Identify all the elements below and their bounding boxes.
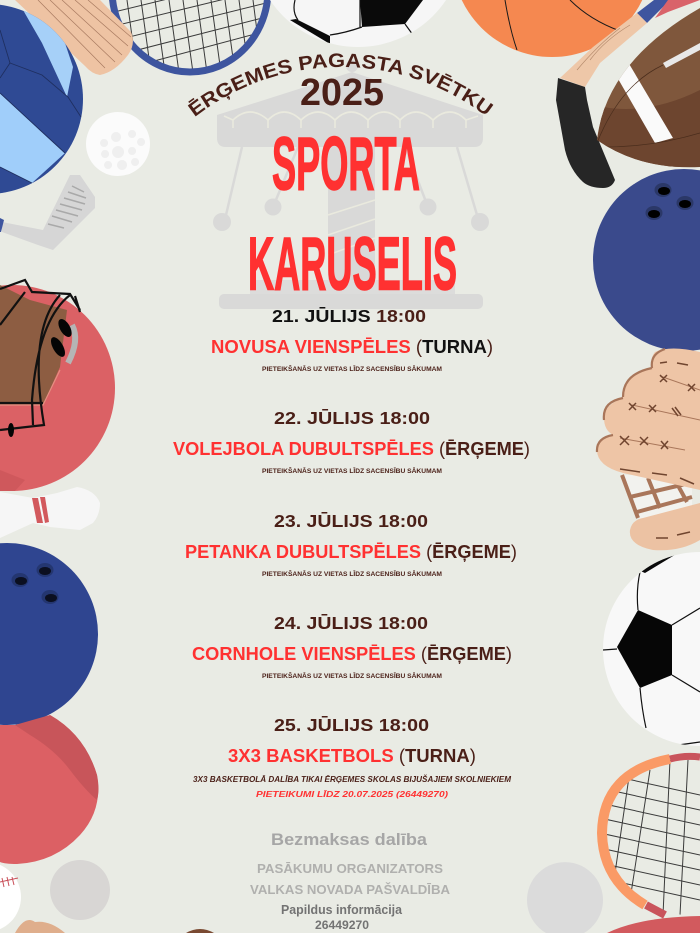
bottom glove pieces <box>15 920 214 933</box>
organizer: VALKAS NOVADA PAŠVALDĪBA <box>250 882 451 897</box>
soccer ball right <box>603 547 700 755</box>
red bowling ball left <box>0 285 115 491</box>
contact info: Papildus informācija <box>281 903 403 917</box>
basketball <box>452 0 652 57</box>
poster: KARUSELIS <box>248 222 457 306</box>
organizer: PASĀKUMU ORGANIZATORS <box>257 861 443 876</box>
event 5 <box>193 715 511 799</box>
event 5: 25. JŪLIJS 18:00 <box>274 715 429 735</box>
event 4: CORNHOLE VIENSPĒLES (ĒRĢEME) <box>192 644 512 664</box>
hockey stick <box>556 0 700 188</box>
red ball left <box>0 715 98 864</box>
event 3: PETANKA DUBULTSPĒLES (ĒRĢEME) <box>185 542 517 562</box>
bowling ball right <box>593 169 700 351</box>
contact info <box>281 903 403 932</box>
event 2: PIETEIKŠANĀS UZ VIETAS LĪDZ SACENSĪBU SĀKUMAM <box>262 466 442 475</box>
blue bowling ball left <box>0 543 98 725</box>
baseball glove <box>597 348 700 550</box>
event 2: 22. JŪLIJS 18:00 <box>274 408 430 428</box>
baseball <box>0 862 21 932</box>
bat <box>15 0 133 75</box>
volleyball <box>0 4 83 194</box>
event 4: PIETEIKŠANĀS UZ VIETAS LĪDZ SACENSĪBU SĀKUMAM <box>262 671 442 680</box>
carousel watermark <box>213 60 489 309</box>
golf club <box>0 175 95 250</box>
event 5: PIETEIKUMI LĪDZ 20.07.2025 (26449270) <box>256 790 448 799</box>
free participation note: Bezmaksas dalība <box>271 831 428 849</box>
golf ball <box>86 112 150 176</box>
curved heading: ĒRĢEMES PAGASTA SVĒTKU <box>188 53 494 116</box>
organizer <box>250 861 451 897</box>
american football <box>597 8 700 167</box>
event 4: 24. JŪLIJS 18:00 <box>274 613 428 633</box>
racquet bottom right <box>600 756 700 915</box>
grey ball left <box>50 860 110 920</box>
tennis ball bottom <box>527 862 603 933</box>
event 5: 3X3 BASKETBOLS (TURNA) <box>228 746 476 766</box>
event 4 <box>192 613 512 680</box>
event 5: 3X3 BASKETBOLĀ DALĪBA TIKAI ĒRĢEMES SKOLAS BIJUŠAJIEM SKOLNIEKIEM <box>193 775 511 784</box>
racquet top <box>110 0 270 80</box>
event 2 <box>173 408 530 475</box>
event 2: VOLEJBOLA DUBULTSPĒLES (ĒRĢEME) <box>173 439 530 459</box>
year: 2025 <box>300 72 384 114</box>
event 3: PIETEIKŠANĀS UZ VIETAS LĪDZ SACENSĪBU SĀKUMAM <box>262 569 442 578</box>
event 1: PIETEIKŠANĀS UZ VIETAS LĪDZ SACENSĪBU SĀKUMAM <box>262 364 442 373</box>
event 1: 21. JŪLIJS 18:00 <box>272 306 426 326</box>
catcher glove <box>0 280 80 437</box>
soccer ball top <box>270 0 446 47</box>
event 3 <box>185 511 517 578</box>
event 1: NOVUSA VIENSPĒLES (TURNA) <box>211 337 493 357</box>
event 1 <box>211 306 493 373</box>
bowling pin <box>0 487 100 538</box>
contact info: 26449270 <box>315 918 369 932</box>
red ball bottom right <box>607 916 700 933</box>
event 3: 23. JŪLIJS 18:00 <box>274 511 428 531</box>
poster: SPORTA <box>272 122 420 206</box>
